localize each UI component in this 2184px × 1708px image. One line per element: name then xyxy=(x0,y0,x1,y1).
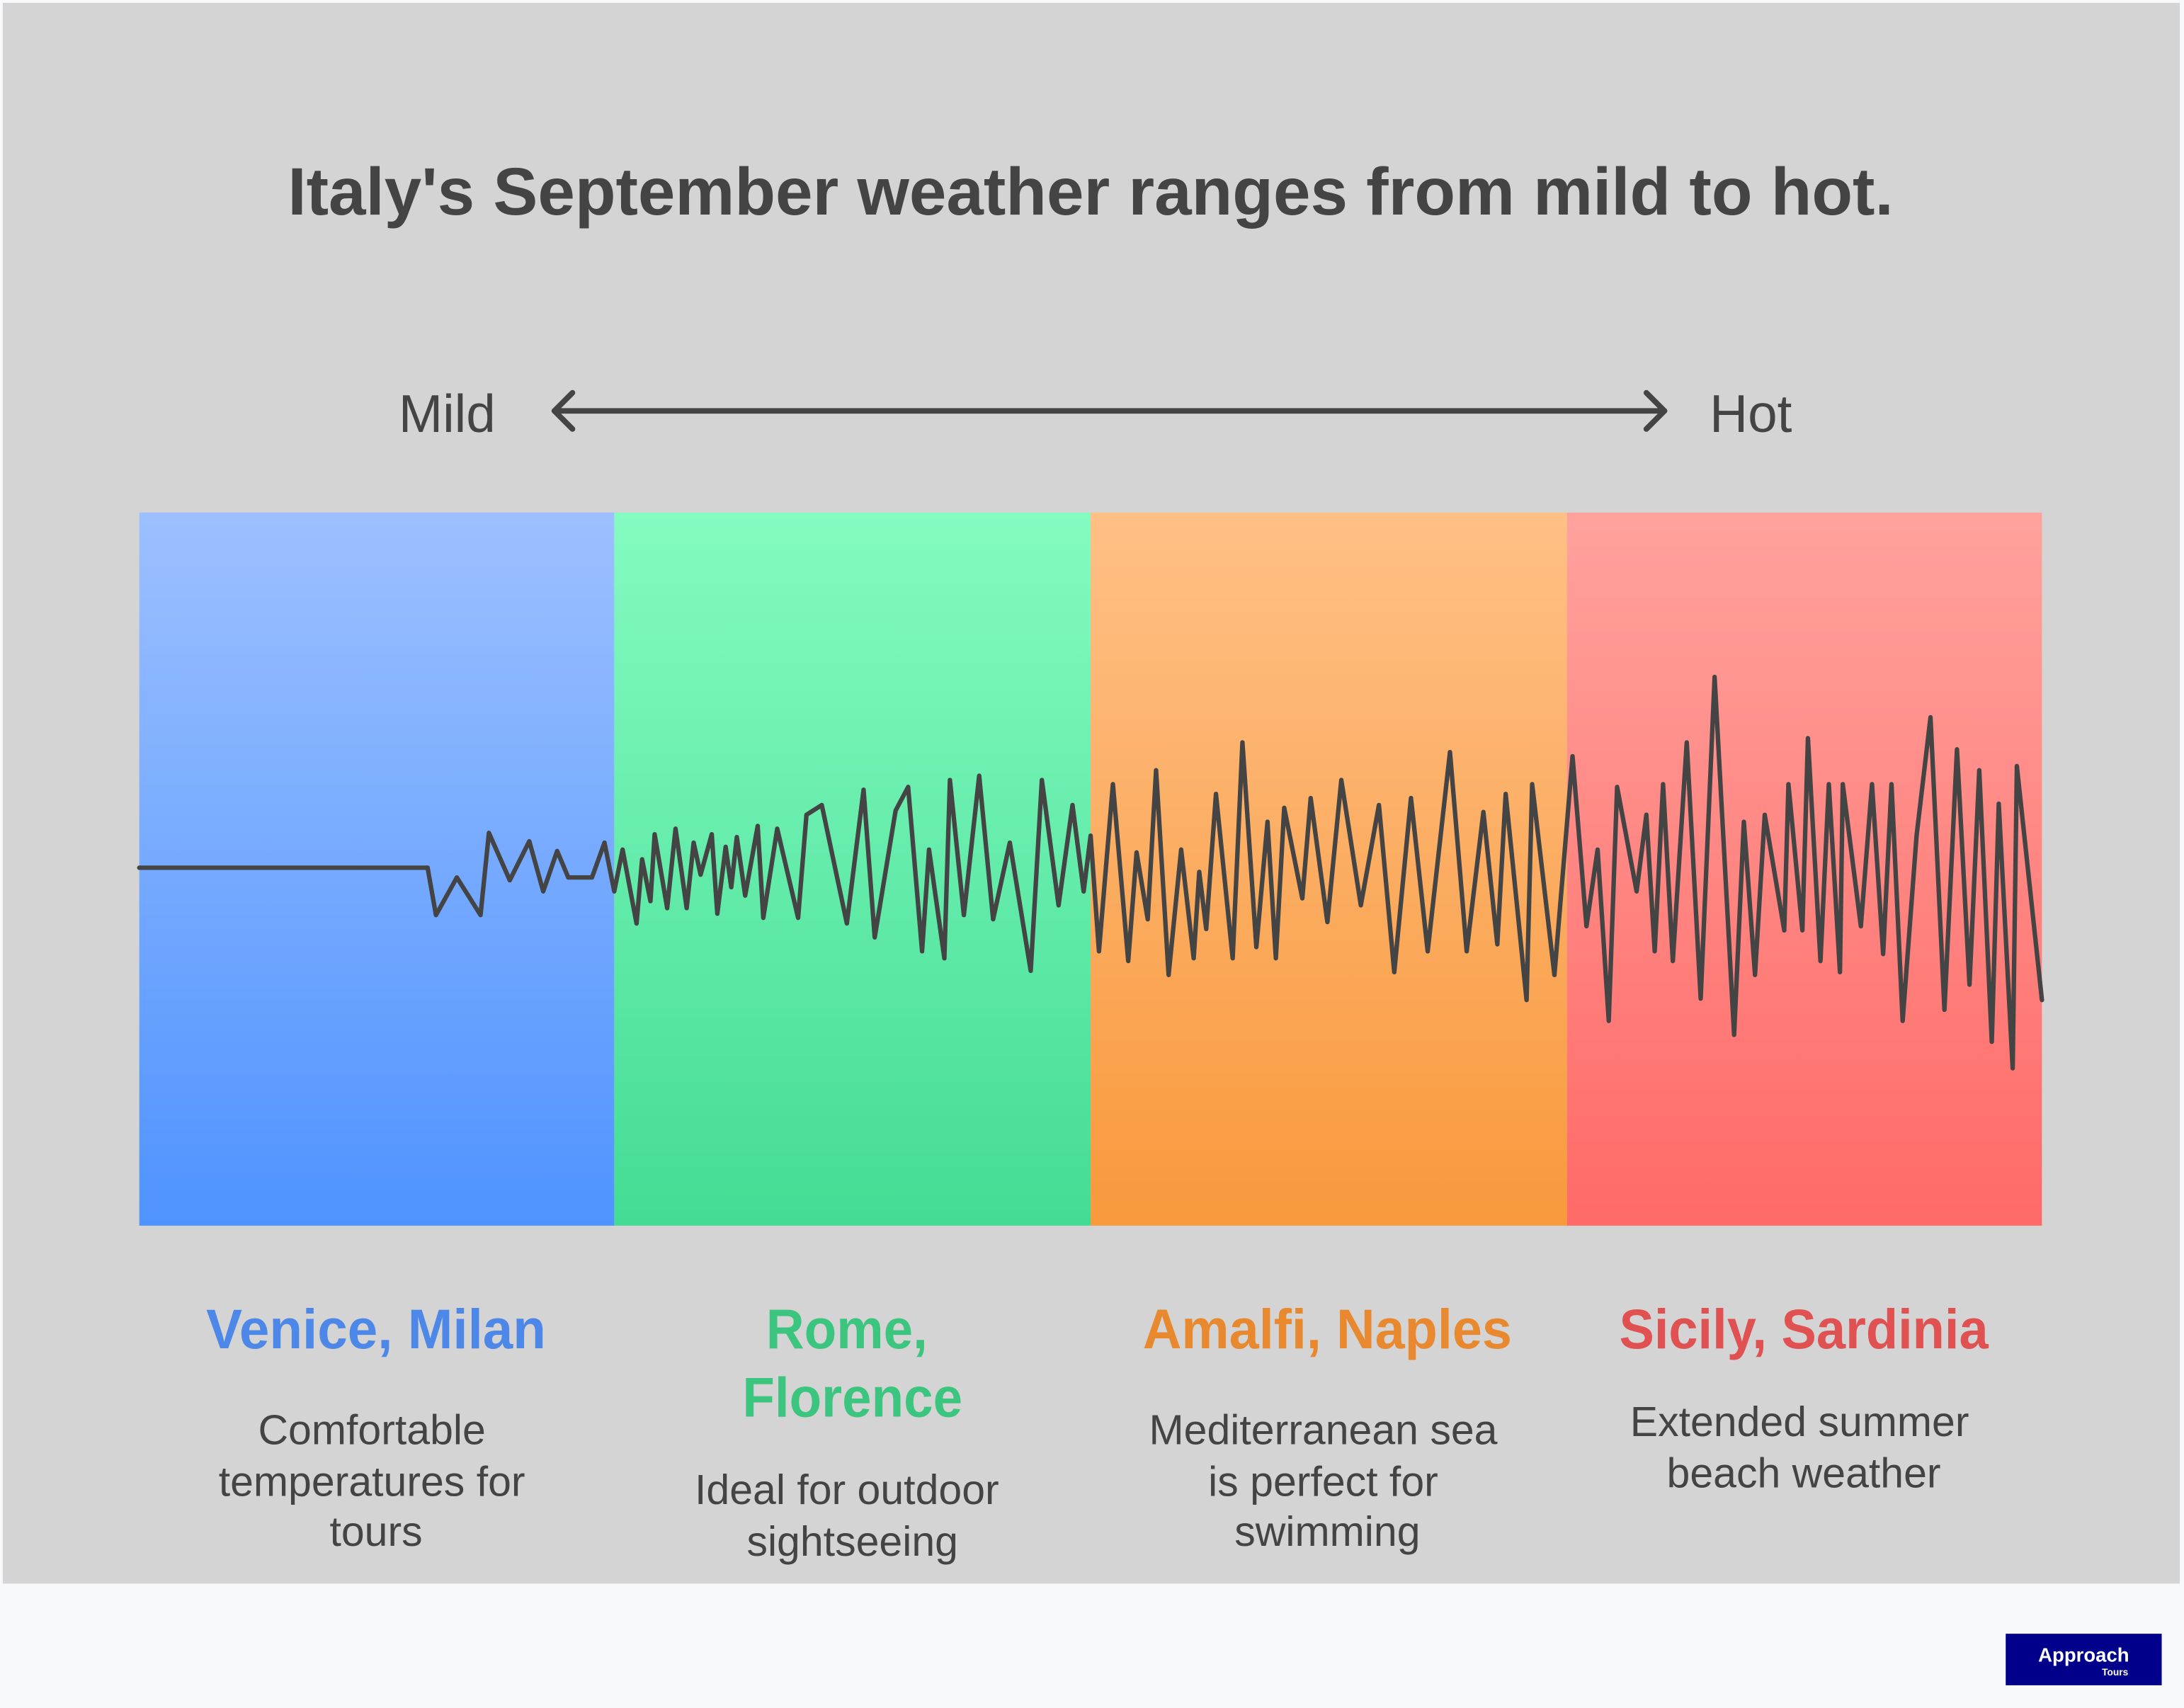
region: Sicily, Sardinia: Extended summer xyxy=(1630,1399,1969,1445)
region: Rome, Florence: Rome, xyxy=(766,1298,928,1360)
region: Venice, Milan: Comfortable xyxy=(258,1407,486,1454)
logo: Approach Tours xyxy=(2006,1634,2162,1685)
region: Amalfi, Naples: is perfect for xyxy=(1208,1458,1438,1505)
scale label: Mild: Mild xyxy=(399,384,496,443)
region: Sicily, Sardinia: Sicily, Sardinia xyxy=(1619,1298,1989,1360)
region: Rome, Florence xyxy=(695,1298,999,1565)
region: Venice, Milan xyxy=(206,1298,546,1555)
band: red xyxy=(1567,513,2042,1226)
region: Amalfi, Naples: swimming xyxy=(1234,1508,1421,1555)
chart: temperature bands xyxy=(140,513,2042,1226)
band: orange xyxy=(1091,513,1567,1226)
region: Venice, Milan: temperatures for xyxy=(219,1458,525,1505)
region: Sicily, Sardinia xyxy=(1619,1298,1989,1497)
region: Amalfi, Naples: Mediterranean sea xyxy=(1149,1407,1498,1454)
region: Rome, Florence: Florence xyxy=(742,1366,962,1428)
arrow: mild to hot xyxy=(554,393,1664,429)
region: Rome, Florence: Ideal for outdoor xyxy=(695,1467,999,1513)
logo: Approach Tours: Tours xyxy=(2102,1667,2129,1678)
band: mild blue xyxy=(140,513,614,1226)
region: Venice, Milan: Venice, Milan xyxy=(206,1298,546,1360)
region: Rome, Florence: sightseeing xyxy=(746,1518,958,1565)
region: Sicily, Sardinia: beach weather xyxy=(1667,1450,1941,1497)
band: green xyxy=(614,513,1091,1226)
scale label: Hot: Hot xyxy=(1710,384,1792,443)
wave line xyxy=(140,677,2042,1069)
logo: Approach Tours: Approach xyxy=(2038,1644,2129,1666)
title: Italy's September weather ranges from mild to hot. xyxy=(288,155,1894,229)
region: Amalfi, Naples: Amalfi, Naples xyxy=(1143,1298,1512,1360)
region: Amalfi, Naples xyxy=(1143,1298,1512,1555)
region: Venice, Milan: tours xyxy=(329,1508,423,1555)
